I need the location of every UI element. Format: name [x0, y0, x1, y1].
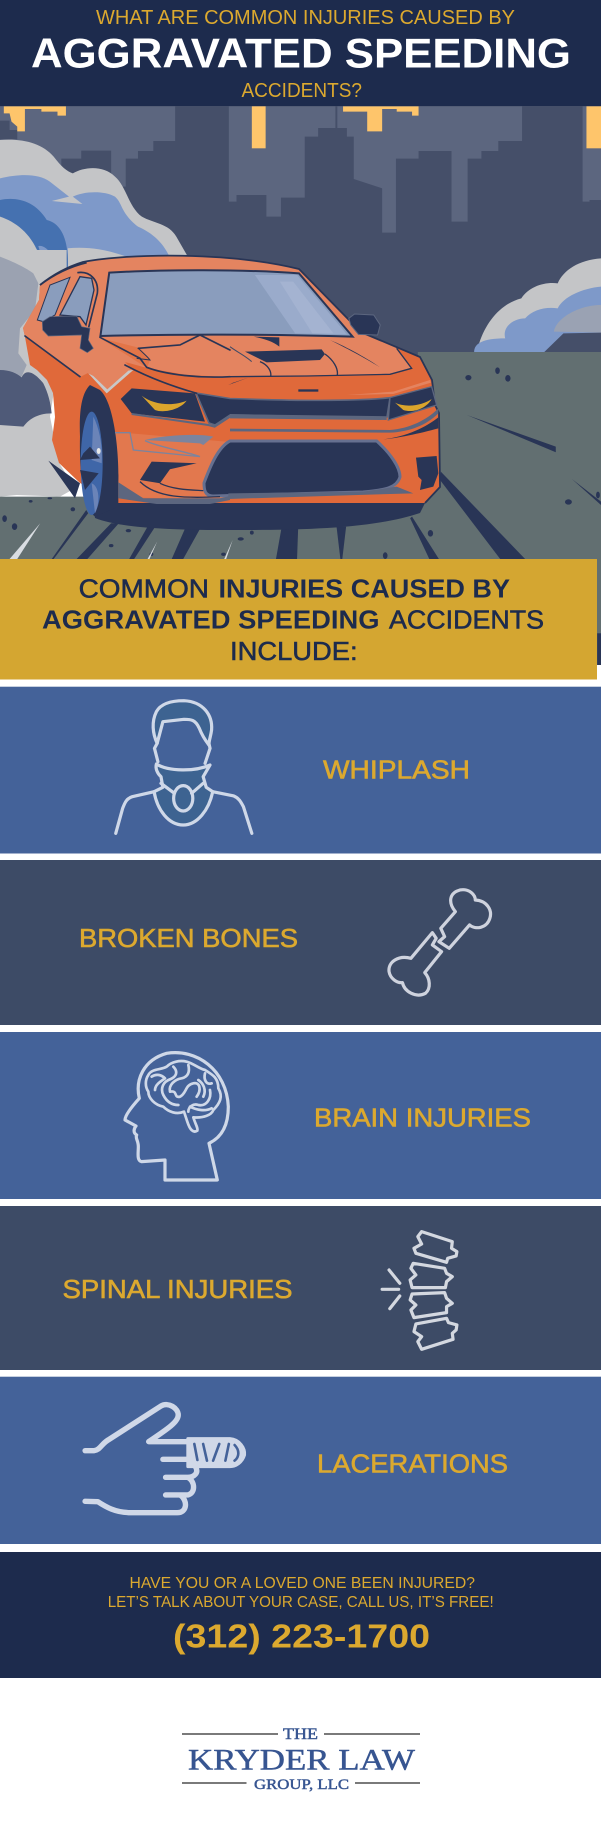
lit windows	[4, 106, 601, 148]
heading line 2: AGGRAVATED SPEEDING	[42, 604, 380, 634]
right side of car	[228, 337, 438, 499]
body highlights	[23, 256, 412, 393]
label: whiplash: WHIPLASH	[323, 755, 470, 785]
right air intake	[416, 456, 438, 490]
icon: head with brain	[125, 1053, 228, 1180]
panel: brain injuries	[0, 1032, 601, 1199]
panel: whiplash	[0, 687, 601, 854]
panel: section heading	[0, 559, 597, 680]
icon: neck brace	[116, 701, 252, 833]
heading line 1: INJURIES CAUSED BY	[218, 574, 510, 604]
hood details	[245, 349, 325, 362]
heading line 3: INCLUDE:	[230, 636, 358, 666]
logo word: group, llc: GROUP, LLC	[254, 1777, 349, 1793]
upper grille	[196, 393, 390, 425]
panel: broken bones	[0, 860, 601, 1025]
heading line 2	[42, 604, 544, 634]
call to action line 2: LET’S TALK ABOUT YOUR CASE, CALL US, IT’S FREE!	[108, 1594, 494, 1611]
city skyline	[0, 106, 601, 233]
label: lacerations: LACERATIONS	[317, 1449, 508, 1479]
icon: bandaged finger	[85, 1405, 245, 1513]
left smoke cloud	[0, 140, 188, 367]
windshield	[100, 270, 380, 337]
label: spinal injuries: SPINAL INJURIES	[62, 1274, 292, 1304]
panel: call to action	[0, 1552, 601, 1678]
panel: spinal injuries	[0, 1206, 601, 1370]
car body	[23, 256, 440, 503]
car outline	[40, 256, 440, 503]
call to action line 1: HAVE YOU OR A LOVED ONE BEEN INJURED?	[130, 1575, 475, 1592]
logo word: kryder law: KRYDER LAW	[188, 1744, 416, 1776]
label: broken bones: BROKEN BONES	[79, 923, 298, 953]
left air intake	[140, 462, 197, 483]
right smoke cloud	[474, 258, 601, 352]
side windows	[37, 277, 70, 322]
car underbody	[90, 455, 440, 530]
orange car	[23, 256, 440, 530]
icon: broken bone	[389, 890, 491, 995]
lower lip	[228, 487, 413, 499]
right headlight	[388, 387, 437, 420]
bumper scoop lines	[145, 435, 213, 445]
icon: spine	[382, 1232, 457, 1349]
heading line 1: COMMON	[79, 574, 209, 604]
left side of car	[25, 263, 230, 517]
illustration: speeding car in the city	[0, 106, 601, 665]
phone number: (312) 223-1700	[173, 1618, 430, 1654]
door and fender lines	[25, 335, 230, 393]
title line 2: AGGRAVATED SPEEDING	[31, 30, 571, 77]
road speed streaks	[2, 345, 601, 559]
title line 1: WHAT ARE COMMON INJURIES CAUSED BY	[96, 7, 515, 29]
grille trim	[230, 414, 387, 420]
left smoke lower	[0, 250, 80, 498]
label: brain injuries: BRAIN INJURIES	[314, 1103, 531, 1133]
lower lip left	[118, 482, 230, 504]
fender highlight	[88, 370, 133, 393]
front wheel	[80, 385, 118, 517]
left mirror	[42, 316, 93, 353]
logo word: the: THE	[283, 1726, 318, 1743]
heading line 2: ACCIDENTS	[389, 604, 544, 634]
road	[0, 345, 601, 665]
heading line 1	[79, 574, 510, 604]
lower grille	[204, 441, 400, 496]
logo: The Kryder Law Group	[182, 1726, 420, 1793]
title line 3: ACCIDENTS?	[242, 80, 362, 102]
title header	[0, 0, 601, 106]
panel: lacerations	[0, 1377, 601, 1544]
left headlight	[121, 388, 205, 422]
